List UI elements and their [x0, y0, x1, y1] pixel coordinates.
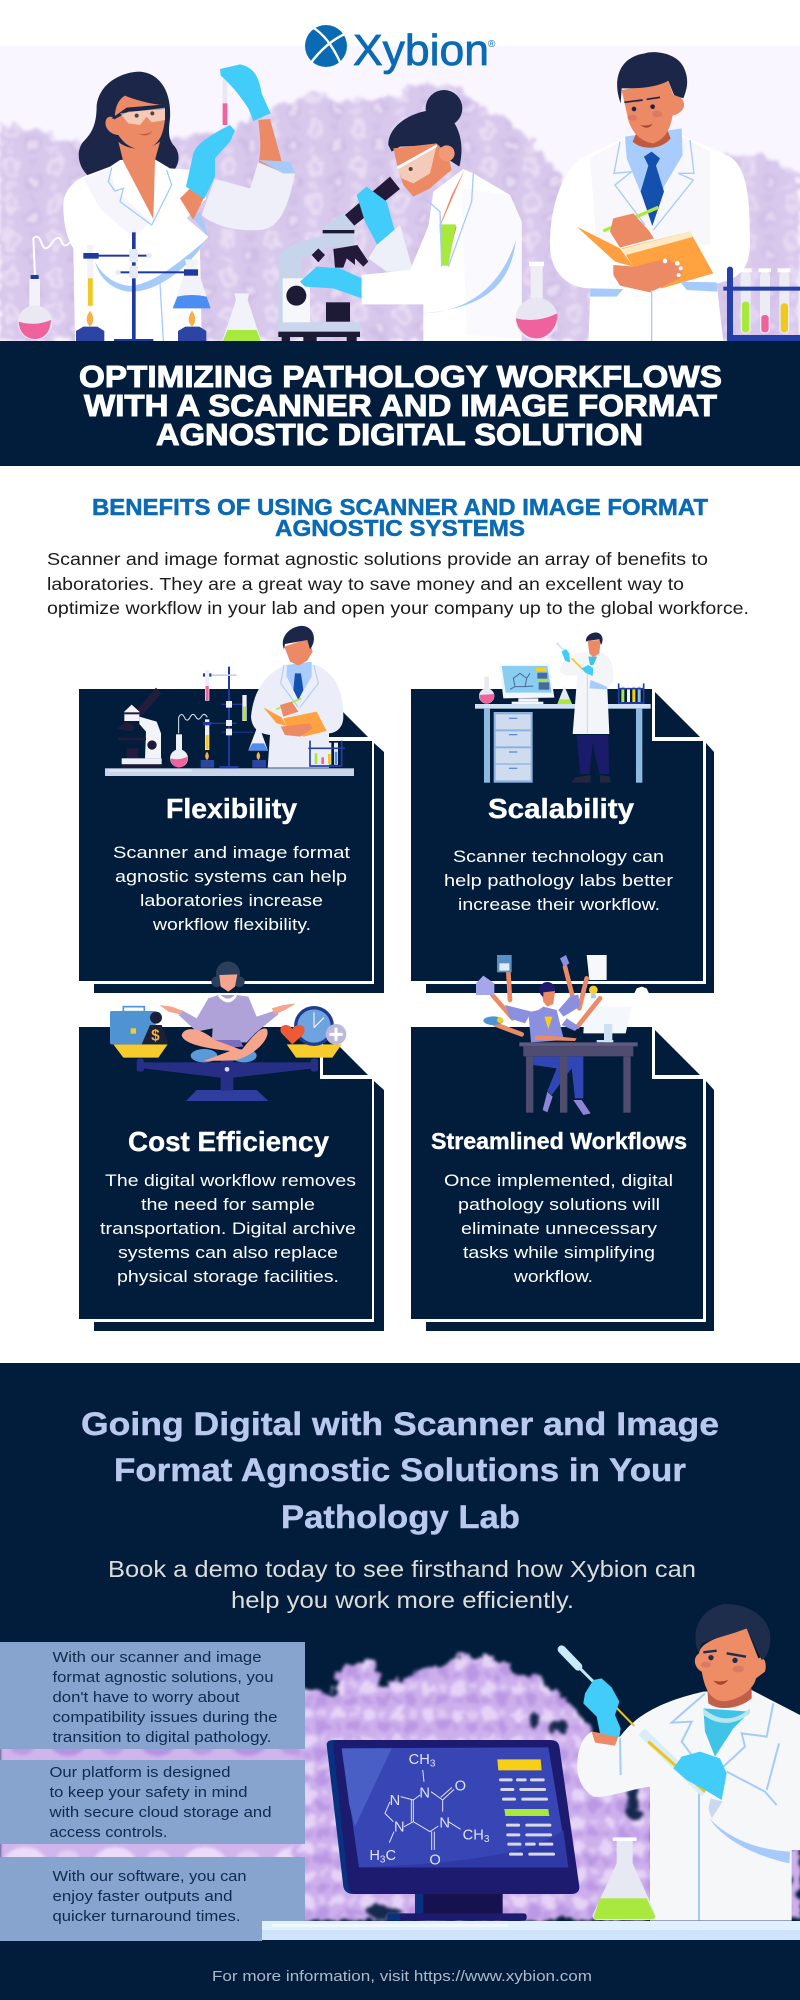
callout: safety: access controls.	[50, 1825, 168, 1841]
intro paragraph: Scanner and image format agnostic solutions provide an array of benefits to	[47, 549, 708, 569]
illustration: cost efficiency balance scale	[110, 961, 346, 1101]
heading: flexibility: Flexibility	[166, 793, 297, 824]
benefits heading: AGNOSTIC SYSTEMS	[275, 515, 525, 541]
flask and coil	[170, 714, 214, 768]
briefcase	[110, 1007, 156, 1044]
illustration: scalability workstation	[475, 632, 651, 783]
callout: compatibility: compatibility issues during the	[52, 1710, 278, 1726]
heading: going digital: Format Agnostic Solutions in Your	[114, 1452, 686, 1488]
title text	[79, 359, 722, 452]
text: streamlined workflows: pathology solutions will	[458, 1195, 660, 1214]
text: cost efficiency: physical storage facilities.	[117, 1267, 339, 1286]
molecule diagram: N	[439, 1815, 450, 1831]
money bag	[142, 1012, 169, 1044]
microscope	[278, 177, 400, 341]
callout: faster outputs: quicker turnaround times.	[52, 1909, 240, 1925]
title band	[0, 341, 800, 466]
logo: Xybion: ®	[488, 39, 496, 50]
text: cost efficiency: systems can also replace	[118, 1243, 338, 1262]
flask green	[593, 1837, 656, 1920]
heading: going digital: Pathology Lab	[281, 1499, 520, 1535]
molecule diagram: CH	[409, 1752, 430, 1768]
footer text: For more information, visit https://www.xybion.com	[212, 1968, 592, 1985]
panel: streamlined workflows	[411, 1027, 714, 1331]
scientist at microscope	[357, 90, 522, 342]
tube rack	[308, 741, 345, 766]
illustration: flexibility lab bench	[105, 626, 354, 776]
panel: scalability	[411, 689, 714, 993]
heading: going digital	[81, 1406, 719, 1535]
callout: faster outputs: With our software, you can	[52, 1869, 246, 1885]
microscope	[117, 688, 162, 768]
molecule diagram	[369, 1752, 490, 1869]
callout: safety: to keep your safety in mind	[50, 1785, 247, 1801]
gear icon	[634, 987, 649, 993]
molecule diagram: 3	[380, 1855, 386, 1866]
molecule diagram: O	[455, 1779, 466, 1795]
held items	[476, 955, 607, 1025]
title text: OPTIMIZING PATHOLOGY WORKFLOWS	[79, 359, 722, 394]
flasks and tube rack	[479, 677, 644, 704]
callout: faster outputs: enjoy faster outputs and	[52, 1889, 232, 1905]
heading: going digital: Going Digital with Scanner and Image	[81, 1406, 719, 1442]
benefits heading: BENEFITS OF USING SCANNER AND IMAGE FORMAT	[92, 494, 709, 520]
section: going digital	[0, 1363, 800, 2000]
text: cost efficiency	[100, 1171, 356, 1286]
lab apparatus left	[18, 232, 261, 342]
money bag: $	[151, 1027, 160, 1044]
text: cost efficiency: transportation. Digital archive	[100, 1219, 356, 1238]
molecule diagram: N	[419, 1785, 430, 1801]
intro paragraph: laboratories. They are a great way to save money and an excellent way to	[47, 574, 684, 594]
text: scalability	[444, 847, 673, 914]
title text: WITH A SCANNER AND IMAGE FORMAT	[84, 388, 717, 423]
molecule diagram: C	[385, 1848, 396, 1864]
scale	[113, 1044, 342, 1101]
computer	[583, 1007, 632, 1042]
scientist with test tube	[63, 64, 295, 342]
intro paragraph: optimize workflow in your lab and open your company up to the global workforce.	[47, 598, 749, 618]
text: scalability: help pathology labs better	[444, 871, 673, 890]
scientist standing	[557, 632, 613, 783]
scientist with notebook	[550, 52, 750, 342]
text: flexibility	[113, 843, 350, 934]
callout: compatibility	[0, 1642, 305, 1749]
logo: Xybion: Xybion	[353, 26, 489, 75]
callout: safety: Our platform is designed	[50, 1765, 231, 1781]
text: streamlined workflows: workflow.	[513, 1267, 593, 1286]
molecule diagram: N	[394, 1820, 405, 1836]
text: flexibility: laboratories increase	[140, 891, 323, 910]
text: streamlined workflows: eliminate unnecessary	[461, 1219, 658, 1238]
tissue background	[293, 1652, 800, 1920]
hero illustration: scientists in lab	[0, 46, 800, 342]
text: scalability: increase their workflow.	[458, 895, 660, 914]
callout: compatibility: don't have to worry about	[52, 1690, 240, 1706]
text: streamlined workflows	[444, 1171, 673, 1286]
callout: compatibility: With our scanner and image	[52, 1650, 262, 1666]
molecule diagram: CH	[463, 1827, 484, 1843]
monitor	[327, 1740, 579, 1921]
panel: flexibility	[79, 689, 384, 993]
logo: Xybion	[305, 25, 496, 75]
title text: AGNOSTIC DIGITAL SOLUTION	[156, 417, 643, 452]
text: flexibility: agnostic systems can help	[115, 867, 347, 886]
tissue background	[0, 82, 800, 342]
lab table	[262, 1921, 800, 1940]
subheading: book a demo: Book a demo today to see firsthand how Xybion can	[108, 1556, 696, 1582]
subheading: book a demo	[108, 1556, 696, 1613]
text: scalability: Scanner technology can	[453, 847, 664, 866]
molecule diagram: 3	[484, 1834, 490, 1845]
screen data panel	[497, 1759, 555, 1856]
scientist with pipette	[562, 1604, 800, 1921]
illustration: streamlined workflows multitasking woman	[476, 955, 649, 1115]
molecule diagram: 3	[430, 1759, 436, 1770]
illustration: digital pathology lab	[0, 1604, 800, 1940]
callout: compatibility: transition to digital pathology.	[52, 1730, 272, 1746]
heading: cost efficiency: Cost Efficiency	[128, 1126, 329, 1157]
text: flexibility: Scanner and image format	[113, 843, 350, 862]
molecule diagram: H	[369, 1848, 380, 1864]
scientist with notebook	[251, 626, 343, 768]
text: flexibility: workflow flexibility.	[152, 915, 311, 934]
ring stand	[203, 667, 268, 768]
callout: compatibility: format agnostic solutions, you	[52, 1670, 274, 1686]
text: cost efficiency: the need for sample	[141, 1195, 315, 1214]
text: cost efficiency: The digital workflow removes	[105, 1171, 356, 1190]
meditating woman	[159, 961, 296, 1062]
clock, heart, plus	[280, 1006, 346, 1046]
computer	[499, 664, 554, 704]
callout: safety	[0, 1760, 305, 1844]
desk	[519, 1042, 638, 1113]
callout: faster outputs	[0, 1857, 305, 1941]
test tube rack	[723, 267, 800, 341]
desk	[475, 704, 651, 783]
molecule diagram: O	[429, 1853, 441, 1869]
text: streamlined workflows: Once implemented, digital	[444, 1171, 673, 1190]
woman with six arms	[492, 967, 600, 1115]
callout: safety: with secure cloud storage and	[48, 1805, 272, 1821]
heading: scalability: Scalability	[488, 793, 634, 824]
tissue strips between panels	[0, 1745, 310, 1862]
benefits heading	[92, 494, 709, 541]
subheading: book a demo: help you work more efficiently.	[231, 1587, 574, 1613]
heading: streamlined workflows: Streamlined Workflows	[431, 1128, 687, 1154]
panel: cost efficiency	[79, 1027, 384, 1331]
flask pink	[515, 262, 558, 340]
molecule diagram: N	[390, 1793, 400, 1809]
intro paragraph	[47, 549, 749, 618]
text: streamlined workflows: tasks while simplifying	[463, 1243, 655, 1262]
